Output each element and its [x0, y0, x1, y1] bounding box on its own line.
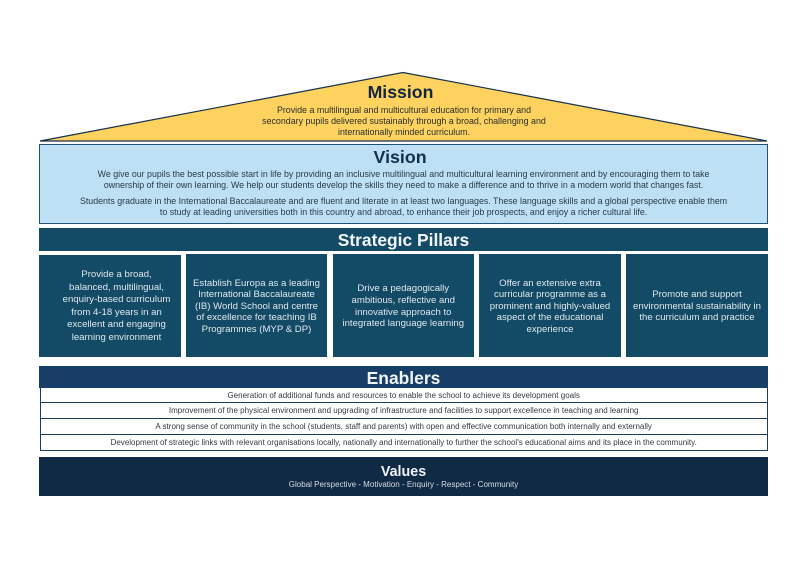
mission text: internationally minded curriculum.	[338, 127, 470, 137]
pillar 3	[332, 254, 474, 357]
pillar 3: Drive a pedagogically	[357, 283, 449, 294]
mission text	[262, 105, 546, 137]
panel: mission	[40, 72, 768, 142]
pillar 4: Offer an extensive extra	[499, 278, 601, 289]
pillar 1: learning environment	[72, 332, 161, 343]
enabler 3: A strong sense of community in the school (students, staff and parents) with open and effective communication both internally and externally	[155, 422, 652, 431]
pillar 3: innovative approach to	[355, 306, 452, 318]
pillar 1	[39, 255, 181, 357]
pillar 1: Provide a broad,	[81, 269, 152, 280]
enabler 1	[40, 388, 768, 403]
vision paragraph 1	[98, 169, 709, 190]
pillar 5: Promote and support	[652, 289, 742, 300]
pillar 1: enquiry-based curriculum	[63, 294, 170, 305]
mission text: Provide a multilingual and multicultural education for primary and	[277, 105, 531, 115]
vision paragraph 2: Students graduate in the International Baccalaureate and are fluent and literate in at least two languages. These language skills and a global perspective enable them	[80, 196, 727, 206]
strategic pillars heading: Strategic Pillars	[338, 230, 469, 250]
vision paragraph 1: ownership of their own learning. We help our students develop the skills they need to make a difference and to thrive in a modern world that changes fast.	[104, 180, 703, 190]
pillar 4: aspect of the educational	[497, 312, 603, 323]
pillar 1: excellent and engaging	[67, 319, 166, 330]
strategic pillars heading	[39, 228, 768, 251]
pillar 2: Programmes (MYP & DP)	[202, 324, 311, 335]
enabler 1: Generation of additional funds and resources to enable the school to achieve its development goals	[227, 391, 580, 400]
enablers heading: Enablers	[367, 368, 440, 388]
enablers heading	[39, 366, 768, 388]
pillar 2: (IB) World School and centre	[195, 301, 318, 312]
pillar 4: prominent and highly-valued	[490, 301, 610, 312]
values list: Global Perspective - Motivation - Enquiry - Respect - Community	[289, 480, 518, 489]
mission heading: Mission	[368, 82, 433, 102]
enabler 2	[40, 403, 768, 419]
enabler 3	[40, 419, 768, 435]
pillar 4: curricular programme as a	[494, 289, 606, 300]
pillar 2: of excellence for teaching IB	[196, 312, 317, 323]
enabler 4	[40, 435, 768, 451]
mission roof shape	[40, 72, 768, 142]
panel: strategic pillars	[39, 254, 768, 357]
enabler 4: Development of strategic links with relevant organisations locally, nationally and internationally to further the school's educational aims and its place in the community.	[111, 438, 697, 447]
pillar 3: integrated language learning	[342, 318, 464, 329]
vision paragraph 2	[80, 196, 727, 217]
pillar 5: the curriculum and practice	[639, 312, 755, 323]
pillar 2: International Baccalaureate	[198, 289, 315, 300]
values heading: Values	[381, 464, 426, 480]
panel: enablers list	[40, 388, 768, 451]
pillar 5: environmental sustainability in	[633, 301, 761, 312]
pillar 4	[479, 254, 621, 357]
vision paragraph 1: We give our pupils the best possible start in life by providing an inclusive multilingual and multicultural learning environment and by encouraging them to take	[98, 169, 709, 179]
pillar 4: experience	[527, 324, 573, 335]
vision heading: Vision	[374, 147, 427, 167]
pillar 2: Establish Europa as a leading	[193, 278, 320, 289]
vision paragraph 2: to study at leading universities both in this country and abroad, to enhance their job prospects, and enjoy a richer cultural life.	[160, 207, 647, 217]
panel: values	[39, 457, 768, 496]
panel: vision	[39, 144, 768, 224]
pillar 3: ambitious, reflective and	[352, 295, 455, 306]
pillar 5	[626, 254, 768, 357]
pillar 2	[186, 254, 327, 357]
pillar 1: balanced, multilingual,	[69, 282, 164, 293]
pillar 1: from 4-18 years in an	[71, 307, 162, 318]
enabler 2: Improvement of the physical environment and upgrading of infrastructure and facilities to support excellence in teaching and learning	[169, 406, 638, 415]
mission text: secondary pupils delivered sustainably through a broad, challenging and	[262, 116, 546, 126]
